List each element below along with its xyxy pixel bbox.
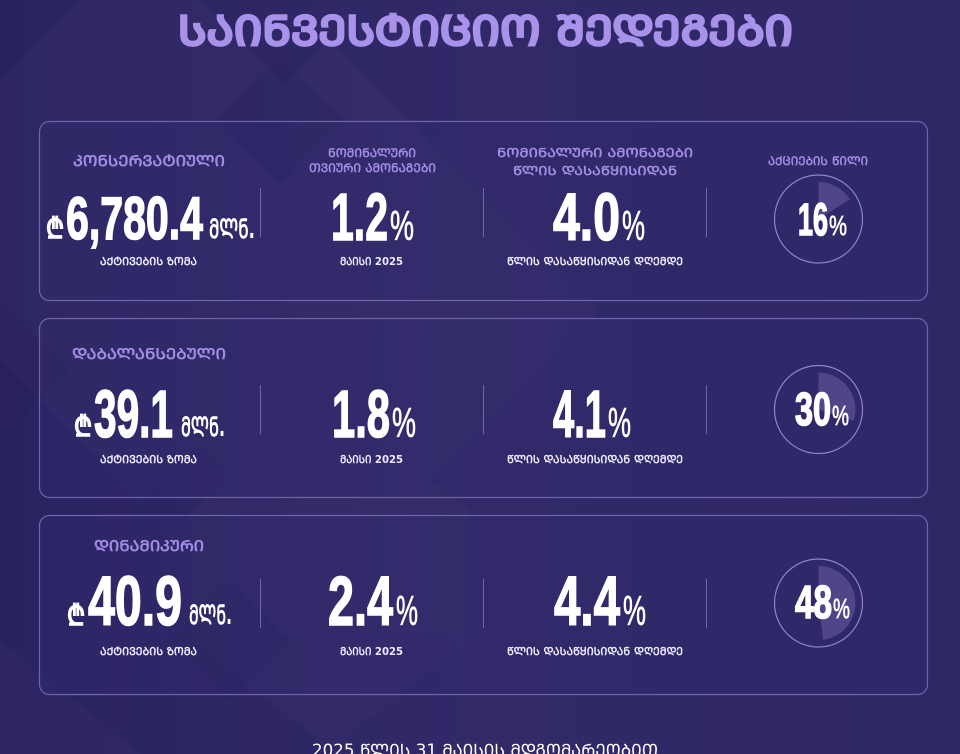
pie: 30%: 30 bbox=[795, 383, 831, 435]
fund name: conservative: ᲙᲝᲜᲡᲔᲠᲕᲐᲢᲘᲣᲚᲘ bbox=[73, 152, 225, 170]
pie: 16%: % bbox=[829, 210, 847, 241]
pie: 48% bbox=[774, 559, 862, 647]
fund name: balanced: ᲓᲐᲑᲐᲚᲐᲜᲡᲔᲑᲣᲚᲘ bbox=[72, 345, 226, 363]
ytd return value: 4.0 bbox=[553, 180, 620, 255]
monthly caption: ᲛᲐᲘᲡᲘ 2025 bbox=[340, 255, 403, 268]
monthly return value: % bbox=[390, 202, 414, 249]
pie: 48%: 48 bbox=[795, 576, 832, 628]
ytd return heading: ᲬᲚᲘᲡ ᲓᲐᲡᲐᲬᲧᲘᲡᲘᲓᲐᲜ bbox=[513, 163, 677, 178]
asset size: conservative: ᲛᲚᲜ. bbox=[209, 214, 255, 245]
asset size: balanced: 39.1 bbox=[94, 377, 173, 452]
monthly caption: ᲛᲐᲘᲡᲘ 2025 bbox=[340, 645, 403, 658]
panel: conservative bbox=[40, 122, 928, 300]
pie: 16% bbox=[774, 175, 862, 263]
ytd return heading: ᲜᲝᲛᲘᲜᲐᲚᲣᲠᲘ ᲐᲛᲝᲜᲐᲒᲔᲑᲘ bbox=[497, 145, 693, 160]
pie: 48%: % bbox=[833, 593, 850, 624]
pie: 30%: % bbox=[832, 400, 849, 431]
ytd return value: % bbox=[622, 202, 645, 249]
asset size caption: ᲐᲥᲢᲘᲕᲔᲑᲘᲡ ᲖᲝᲛᲐ bbox=[100, 645, 197, 658]
asset size: conservative: ₾ bbox=[46, 212, 64, 245]
asset size caption: ᲐᲥᲢᲘᲕᲔᲑᲘᲡ ᲖᲝᲛᲐ bbox=[100, 453, 197, 466]
asset size: balanced: ᲛᲚᲜ. bbox=[181, 412, 225, 443]
ytd return heading bbox=[497, 145, 693, 178]
monthly return heading: ᲜᲝᲛᲘᲜᲐᲚᲣᲠᲘ bbox=[328, 146, 416, 160]
asset size: dynamic: 40.9 bbox=[88, 562, 182, 640]
ytd caption: ᲬᲚᲘᲡ ᲓᲐᲡᲐᲬᲧᲘᲡᲘᲓᲐᲜ ᲓᲦᲔᲛᲓᲔ bbox=[507, 255, 683, 268]
fund name: dynamic: ᲓᲘᲜᲐᲛᲘᲙᲣᲠᲘ bbox=[94, 537, 204, 555]
monthly caption: ᲛᲐᲘᲡᲘ 2025 bbox=[340, 453, 403, 466]
monthly return value: % bbox=[392, 399, 416, 446]
asset size: dynamic: ₾ bbox=[67, 599, 85, 632]
asset size: dynamic: ᲛᲚᲜ. bbox=[189, 600, 232, 631]
ytd return value: % bbox=[608, 399, 631, 446]
monthly return value: 1.8 bbox=[332, 377, 390, 452]
monthly return value: % bbox=[396, 587, 418, 634]
monthly return heading bbox=[309, 146, 436, 175]
title: ᲡᲐᲘᲜᲕᲔᲡᲢᲘᲪᲘᲝ ᲨᲔᲓᲔᲒᲔᲑᲘ bbox=[178, 7, 793, 55]
ytd caption: ᲬᲚᲘᲡ ᲓᲐᲡᲐᲬᲧᲘᲡᲘᲓᲐᲜ ᲓᲦᲔᲛᲓᲔ bbox=[507, 453, 683, 466]
pie: 30% bbox=[774, 366, 862, 454]
ytd return value: 4.1 bbox=[553, 377, 606, 452]
asset size caption: ᲐᲥᲢᲘᲕᲔᲑᲘᲡ ᲖᲝᲛᲐ bbox=[100, 255, 197, 268]
asset size: balanced: ₾ bbox=[74, 410, 92, 443]
panel: dynamic bbox=[40, 516, 928, 694]
ytd caption: ᲬᲚᲘᲡ ᲓᲐᲡᲐᲬᲧᲘᲡᲘᲓᲐᲜ ᲓᲦᲔᲛᲓᲔ bbox=[507, 645, 683, 658]
equity share heading: ᲐᲥᲪᲘᲔᲑᲘᲡ ᲬᲘᲚᲘ bbox=[768, 154, 868, 168]
monthly return heading: ᲗᲕᲘᲣᲠᲘ ᲐᲛᲝᲜᲐᲒᲔᲑᲘ bbox=[309, 161, 436, 175]
ytd return value: 4.4 bbox=[554, 562, 620, 640]
panel: balanced bbox=[40, 318, 928, 498]
monthly return value: 1.2 bbox=[331, 180, 388, 255]
asset size: conservative: 6,780.4 bbox=[66, 185, 203, 252]
pie: 16%: 16 bbox=[798, 194, 828, 245]
ytd return value: % bbox=[623, 587, 646, 634]
monthly return value: 2.4 bbox=[328, 562, 393, 640]
